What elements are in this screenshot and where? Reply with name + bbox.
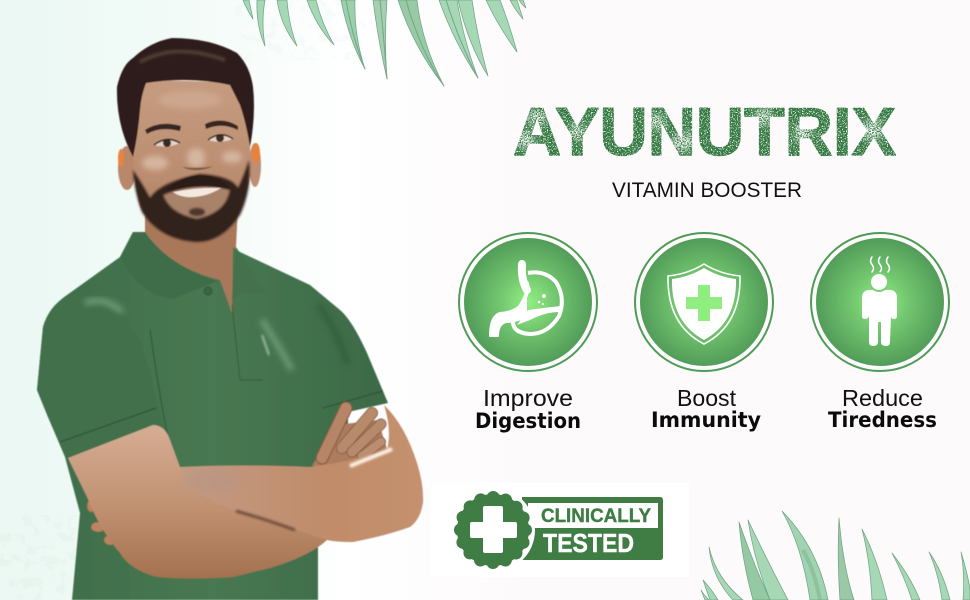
label [475,385,581,433]
hair [117,38,254,157]
face [133,80,251,242]
bottom palm leaves [701,511,970,600]
far hand fingers [87,500,116,545]
badge text [541,506,651,558]
label: Immunity [651,408,761,432]
label: Improve [483,385,573,411]
icon: tired person [811,233,949,371]
neck [145,205,238,313]
label: Boost [677,385,737,411]
eyes and brows [145,120,238,170]
mustache [164,175,230,192]
banner [522,497,663,560]
label [651,385,761,432]
icon: stomach [459,233,597,371]
green polo shirt [37,232,388,600]
upper arm and forearm [68,425,327,578]
ears [118,143,261,190]
benefit: reduce tiredness [811,233,949,432]
smile teeth [173,188,221,197]
seal [451,488,535,572]
badge text: CLINICALLY [541,506,651,527]
cheek and nose highlights [142,91,242,170]
icon: shield [635,233,773,371]
clinically tested badge [431,483,689,577]
label: Tiredness [828,408,937,432]
label [828,385,937,432]
label: Digestion [475,409,581,433]
beard [133,160,250,242]
subtitle: VITAMIN BOOSTER [612,179,802,202]
benefit: boost immunity [635,233,773,432]
brand title: AYUNUTRIX [513,94,896,170]
benefit: improve digestion [459,233,597,433]
man with crossed arms [37,38,423,600]
seal cross [470,506,517,553]
label: Reduce [842,385,923,411]
badge text: TESTED [543,528,634,558]
crossed forearm [180,405,423,542]
top palm leaves [243,0,526,86]
near hand on bicep [312,408,388,466]
